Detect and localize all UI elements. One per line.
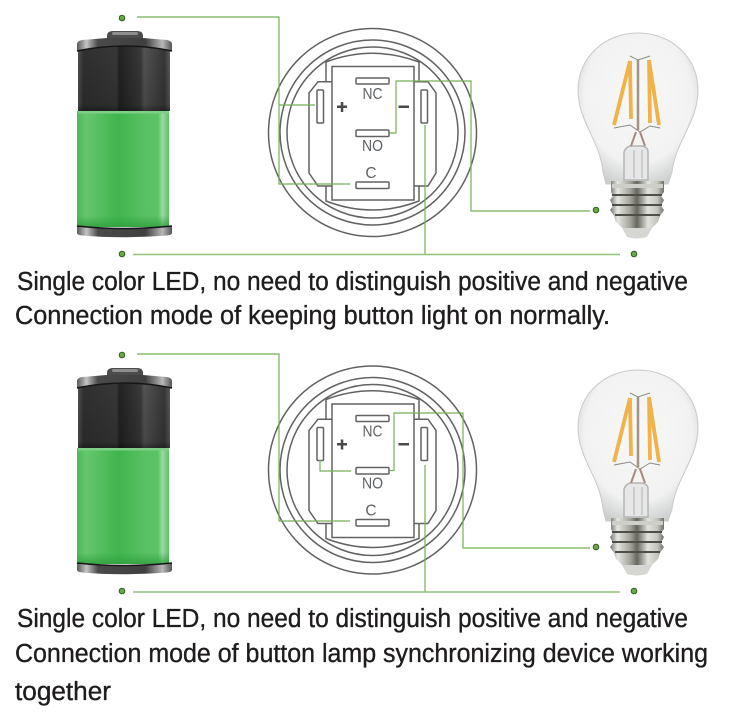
switch labels: [337, 424, 409, 520]
icon: light bulb: [578, 370, 698, 576]
wiring lines: [133, 17, 620, 254]
panel: synchronized wiring diagram: [77, 352, 698, 594]
switch labels: NO: [362, 138, 383, 155]
switch labels: NC: [362, 86, 382, 103]
icon: switch terminal diagram: [268, 366, 476, 574]
icon: battery: [77, 368, 172, 574]
switch labels: C: [365, 502, 377, 520]
text: first caption: [15, 268, 688, 330]
terminal dots: [119, 352, 637, 594]
text: second caption: [15, 605, 708, 706]
switch labels: NO: [362, 476, 383, 492]
icon: light bulb: [578, 33, 698, 238]
text: second caption: together: [15, 678, 112, 706]
text: first caption: Connection mode of keeping button light on normally.: [15, 302, 610, 330]
icon: switch terminal diagram: [268, 28, 476, 236]
icon: battery: [77, 31, 172, 237]
switch labels: C: [365, 165, 377, 182]
text: second caption: Connection mode of button lamp synchronizing device working: [15, 640, 708, 668]
switch labels: [337, 86, 409, 182]
text: second caption: Single color LED, no need to distinguish positive and negative: [17, 605, 688, 633]
wiring lines: [133, 354, 620, 592]
switch labels: NC: [362, 424, 382, 440]
panel: normally-on wiring diagram: [77, 15, 698, 257]
terminal dots: [119, 15, 637, 257]
text: first caption: Single color LED, no need to distinguish positive and negative: [17, 268, 688, 296]
